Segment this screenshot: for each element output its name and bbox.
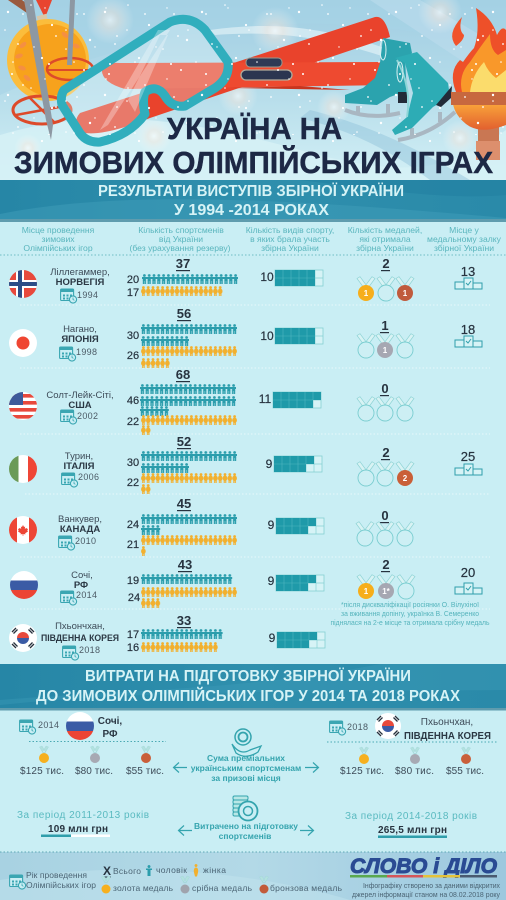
- panel: Pyeongchang 2018: ПІВДЕННА КОРЕЯ: [404, 731, 491, 742]
- prize money caption: Сума преміальних: [207, 753, 285, 763]
- icon: ski goggles: [61, 19, 228, 142]
- medals: 1: [403, 289, 408, 298]
- flag: South Korea: [9, 624, 37, 652]
- location: Пхьончхан,: [55, 621, 105, 632]
- medal table place: 20: [461, 565, 475, 580]
- panel: Pyeongchang 2018: 2018: [347, 722, 368, 732]
- header illustration: [0, 0, 506, 180]
- athletes: [127, 434, 237, 494]
- athletes: [127, 306, 237, 368]
- panel: Pyeongchang 2018: $55 тис.: [446, 766, 484, 777]
- athletes: 68: [176, 367, 190, 382]
- location: 1998: [76, 347, 97, 357]
- banner: results heading: У 1994 -2014 РОКАХ: [174, 202, 329, 219]
- sports count: 9: [266, 457, 273, 471]
- athletes: 20: [127, 274, 139, 286]
- table column headers: збірна України: [356, 243, 414, 253]
- medals: [357, 256, 414, 301]
- table column headers: Кількість спортсменів: [138, 225, 224, 235]
- medals: [357, 318, 414, 358]
- icon: gold medal: [7, 0, 89, 101]
- athletes: [127, 367, 237, 435]
- sports count: [268, 518, 324, 534]
- title: [14, 111, 493, 180]
- medal table place: [455, 449, 482, 475]
- row: 1998 Japan: [9, 306, 482, 368]
- location: Ванкувер,: [58, 514, 102, 525]
- arrow: left spending: [178, 826, 192, 836]
- panel: Sochi 2014: 2014: [38, 720, 59, 730]
- location: США: [68, 400, 92, 411]
- athletes: 33: [177, 613, 191, 628]
- location: Нагано,: [63, 324, 97, 335]
- medal table place: [455, 565, 482, 594]
- flag: Russia: [10, 571, 38, 599]
- spending 2011-2013: 109 млн грн: [48, 824, 108, 835]
- icon: ski poles: [13, 0, 93, 140]
- table column headers: Кількість медалей,: [348, 225, 422, 235]
- medal table place: [455, 264, 482, 289]
- location: [61, 570, 97, 605]
- flag: USA: [9, 392, 37, 420]
- athletes: 22: [127, 477, 139, 489]
- medal table place: 25: [461, 449, 475, 464]
- location: КАНАДА: [60, 524, 100, 535]
- sports count: 9: [268, 518, 275, 532]
- sports count: [268, 574, 324, 591]
- location: [60, 324, 99, 361]
- prize money caption: за призові місця: [211, 773, 281, 783]
- spending 2014-2018: 265,5 млн грн: [378, 825, 447, 836]
- sports count: [266, 456, 322, 472]
- panel: Pyeongchang 2018: $80 тис.: [395, 766, 434, 777]
- athletes: 56: [177, 306, 191, 321]
- spending 2014-2018: [345, 811, 477, 838]
- athletes: [127, 613, 223, 654]
- sports count: 11: [259, 392, 272, 406]
- sports count: [260, 328, 323, 344]
- medal table place: 18: [461, 322, 475, 337]
- medals: 2: [403, 474, 408, 483]
- footnote: [330, 600, 490, 627]
- location: 2018: [79, 645, 100, 655]
- athletes: 37: [176, 256, 190, 271]
- athletes: 24: [127, 519, 139, 531]
- location: 2002: [77, 411, 98, 421]
- location: [41, 621, 119, 660]
- source note: [352, 881, 500, 899]
- table column headers: Місце проведення: [22, 225, 95, 235]
- medals: 1: [383, 346, 388, 355]
- table column headers: Кількість видів спорту,: [246, 225, 334, 235]
- flag: Italy: [9, 455, 38, 483]
- title: УКРАЇНА НА: [167, 111, 342, 146]
- legend: чоловік: [156, 865, 187, 875]
- legend: X: [103, 864, 111, 878]
- sports count: 9: [268, 574, 275, 588]
- row: 2006 Italy: [9, 434, 482, 494]
- medals: [357, 381, 414, 421]
- location: 2010: [75, 536, 96, 546]
- medals: 2: [382, 557, 390, 572]
- medal table place: [455, 322, 482, 347]
- athletes: 21: [127, 539, 139, 551]
- location: [46, 390, 114, 424]
- medals: 1*: [382, 587, 391, 596]
- spending 2014-2018: За період 2014-2018 років: [345, 811, 477, 822]
- spending caption: [194, 821, 298, 841]
- sports count: 9: [269, 631, 276, 645]
- icon: coin stack: [233, 796, 258, 820]
- medals: 2: [382, 256, 390, 271]
- athletes: 52: [177, 434, 191, 449]
- panel: Pyeongchang 2018: Пхьончхан,: [421, 717, 473, 728]
- legend: жінка: [203, 865, 226, 875]
- medals: 1: [364, 587, 369, 596]
- banner: results heading: РЕЗУЛЬТАТИ ВИСТУПІВ ЗБІРНОЇ УКРАЇНИ: [98, 182, 404, 200]
- footnote: піднялася на 2-е місце та отримала срібну медаль: [330, 618, 490, 627]
- location: [62, 451, 99, 487]
- table column headers: від України: [159, 234, 203, 244]
- icon: olympic torch: [451, 8, 506, 160]
- sports count: [269, 631, 325, 648]
- location: ПІВДЕННА КОРЕЯ: [41, 633, 119, 644]
- prize medals: [359, 747, 471, 764]
- panel: Sochi 2014: $125 тис.: [20, 766, 64, 777]
- location: [50, 267, 110, 303]
- athletes: 17: [127, 629, 139, 641]
- spending 2011-2013: [17, 810, 149, 837]
- table column headers: зимових: [41, 234, 75, 244]
- location: 2006: [78, 472, 99, 482]
- athletes: 19: [127, 575, 139, 587]
- legend: Рік проведення: [26, 870, 87, 880]
- location: НОРВЕГІЯ: [56, 277, 104, 288]
- table column headers: Місце у: [449, 225, 480, 235]
- location: [58, 514, 102, 550]
- legend: [10, 864, 343, 894]
- medals: 2: [382, 445, 390, 460]
- athletes: 46: [127, 395, 139, 407]
- table column headers: збірної України: [434, 243, 494, 253]
- legend: срібна медаль: [192, 883, 253, 893]
- icon: ice skates: [345, 38, 455, 140]
- row: 2014 Russia: [10, 557, 490, 627]
- location: 2014: [76, 590, 97, 600]
- footnote: *після дискваліфікації росіянки О. Вілухіної: [341, 600, 479, 609]
- panel: Sochi 2014: $55 тис.: [126, 766, 164, 777]
- table column headers: Олімпійських ігор: [23, 243, 93, 253]
- footer: [0, 852, 506, 900]
- arrow: left prizes: [174, 762, 187, 772]
- medals: 0: [381, 508, 389, 523]
- flag: Canada: [9, 516, 37, 544]
- athletes: 43: [178, 557, 192, 572]
- sports count: [260, 270, 323, 286]
- table column headers: збірна України: [261, 243, 319, 253]
- banner: spending heading: ДО ЗИМОВИХ ОЛІМПІЙСЬКИХ ІГОР У 2014 ТА 2018 РОКАХ: [36, 686, 460, 705]
- location: 1994: [77, 290, 98, 300]
- location: Ліллегаммер,: [50, 267, 110, 278]
- legend: Олімпійських ігор: [26, 880, 96, 890]
- athletes: [127, 496, 237, 556]
- row: 2018 South Korea: [9, 613, 325, 660]
- sports count: [259, 392, 321, 408]
- panel: Sochi 2014: [20, 712, 166, 777]
- table column headers: в яких брала участь: [250, 234, 330, 244]
- banner: results heading: [0, 180, 506, 222]
- legend: бронзова медаль: [270, 883, 343, 893]
- flag: Japan: [9, 329, 37, 357]
- row: 2002 USA: [9, 367, 414, 435]
- table column headers: [22, 225, 502, 253]
- athletes: 30: [127, 457, 139, 469]
- legend: Всього: [113, 866, 141, 876]
- table column headers: медальному залку: [427, 234, 502, 244]
- medals: [357, 445, 414, 486]
- prize money caption: [191, 753, 301, 783]
- athletes: 26: [127, 350, 139, 362]
- athletes: 24: [128, 592, 140, 604]
- title: ЗИМОВИХ ОЛІМПІЙСЬКИХ ІГРАХ: [14, 144, 493, 180]
- panel: Pyeongchang 2018: $125 тис.: [340, 766, 384, 777]
- flag: Norway: [9, 270, 37, 298]
- location: ІТАЛІЯ: [64, 461, 95, 472]
- spending caption: Витрачено на підготовку: [194, 821, 298, 831]
- athletes: 16: [127, 642, 139, 654]
- arrow: right prizes: [305, 762, 318, 772]
- medals: 1: [364, 289, 369, 298]
- table column headers: (без урахування резерву): [129, 243, 231, 253]
- medals: 0: [381, 381, 389, 396]
- footnote: за вживання допінгу, українка В. Семеренко: [341, 609, 479, 618]
- prize medals: [39, 746, 151, 763]
- medals: 1: [381, 318, 389, 333]
- athletes: 45: [177, 496, 191, 511]
- panel: Sochi 2014: РФ: [102, 729, 118, 740]
- prize money caption: українським спортсменам: [191, 763, 301, 773]
- sports count: 10: [260, 329, 274, 343]
- medal table place: 13: [461, 264, 475, 279]
- panel: Sochi 2014: Сочі,: [98, 716, 122, 727]
- spending caption: спортсменів: [219, 831, 271, 841]
- athletes: [127, 557, 237, 608]
- flag: Russia: [66, 712, 94, 740]
- legend: золота медаль: [113, 883, 174, 893]
- sports count: 10: [260, 270, 274, 284]
- icon: hand with coin: [232, 729, 261, 756]
- spending 2011-2013: За період 2011-2013 років: [17, 810, 149, 821]
- icon: skis: [76, 17, 392, 133]
- panel: Sochi 2014: $80 тис.: [75, 766, 113, 777]
- arrow: right spending: [300, 826, 314, 836]
- location: Сочі,: [71, 570, 93, 581]
- location: Солт-Лейк-Сіті,: [46, 390, 114, 401]
- banner: spending heading: ВИТРАТИ НА ПІДГОТОВКУ ЗБІРНОЇ УКРАЇНИ: [85, 667, 411, 685]
- table column headers: які отримала: [359, 234, 411, 244]
- row: 1994 Norway: [9, 256, 482, 303]
- logo: СЛОВО і ДІЛО: [350, 855, 497, 878]
- athletes: [127, 256, 238, 299]
- location: Турин,: [65, 451, 93, 462]
- athletes: 17: [127, 287, 139, 299]
- banner: spending heading: [0, 664, 506, 710]
- flag: South Korea: [375, 713, 401, 739]
- location: РФ: [74, 580, 88, 591]
- row: 2010 Canada: [9, 496, 414, 556]
- panel: Pyeongchang 2018: [327, 713, 497, 777]
- athletes: 22: [127, 416, 139, 428]
- athletes: 30: [127, 330, 139, 342]
- medals: [357, 557, 415, 599]
- location: ЯПОНІЯ: [61, 334, 99, 345]
- medals: [356, 508, 414, 546]
